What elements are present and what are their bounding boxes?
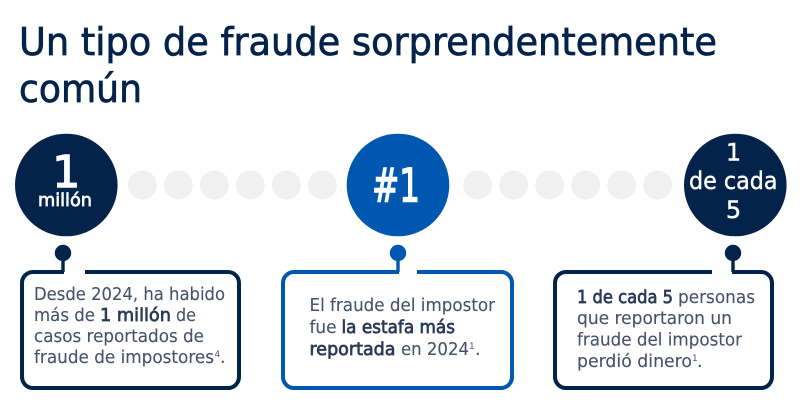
stat circle: 1 millón bbox=[15, 134, 118, 236]
timeline dots: left bbox=[128, 170, 337, 200]
connector pin bbox=[390, 245, 406, 272]
callout text: en 2024 bbox=[401, 340, 469, 360]
stat circle: #1 bbox=[347, 134, 449, 236]
stat circle: 1 de cada 5: 5 bbox=[726, 196, 741, 224]
callout text: fraude del impostor bbox=[577, 330, 743, 350]
callout text: la estafa más bbox=[342, 318, 455, 338]
stat circle: #1: #1 bbox=[372, 158, 420, 212]
stat circle: 1 millón: millón bbox=[38, 191, 92, 211]
callout text bbox=[34, 285, 226, 368]
callout text: Desde 2024, ha habido bbox=[34, 285, 225, 305]
callout text: fue bbox=[310, 318, 336, 338]
callout text: personas bbox=[678, 288, 755, 308]
callout text: más de bbox=[34, 306, 95, 326]
callout text: 4 bbox=[214, 350, 220, 360]
callout text: . bbox=[475, 340, 481, 360]
callout text: perdió dinero bbox=[577, 352, 692, 372]
connector pin bbox=[55, 245, 71, 272]
timeline dots: right bbox=[463, 170, 672, 200]
callout text bbox=[577, 288, 755, 372]
callout: estafa más reportada bbox=[283, 245, 512, 388]
callout text: . bbox=[697, 352, 703, 372]
stat circle: 1 de cada 5: de cada bbox=[689, 167, 778, 195]
callout text: casos reportados de bbox=[34, 327, 204, 347]
stat circle: 1 de cada 5: 1 bbox=[726, 138, 741, 166]
callout: 1 millón bbox=[22, 245, 239, 388]
title: Un tipo de fraude sorprendentemente bbox=[19, 20, 717, 64]
callout text: que reportaron un bbox=[577, 309, 732, 329]
callout text: 1 bbox=[692, 354, 698, 364]
stat circle: 1 millón: 1 bbox=[52, 147, 80, 198]
callout border bbox=[22, 272, 239, 388]
callout border bbox=[283, 272, 512, 388]
callout text: . bbox=[220, 348, 226, 368]
callout text: 1 de cada 5 bbox=[577, 288, 673, 308]
callout text: fraude de impostores bbox=[34, 348, 214, 368]
connector pin bbox=[725, 245, 741, 272]
callout text: El fraude del impostor bbox=[310, 296, 496, 316]
callout border bbox=[555, 272, 772, 388]
callout text: 1 millón bbox=[100, 306, 171, 326]
callout text: 1 bbox=[469, 342, 475, 352]
title: común bbox=[19, 67, 142, 111]
callout text: reportada bbox=[310, 340, 396, 360]
callout text bbox=[310, 296, 496, 360]
stat circle: 1 de cada 5 bbox=[684, 134, 787, 236]
callout: 1 de cada 5 bbox=[555, 245, 772, 388]
callout text: de bbox=[176, 306, 196, 326]
title bbox=[19, 20, 717, 111]
